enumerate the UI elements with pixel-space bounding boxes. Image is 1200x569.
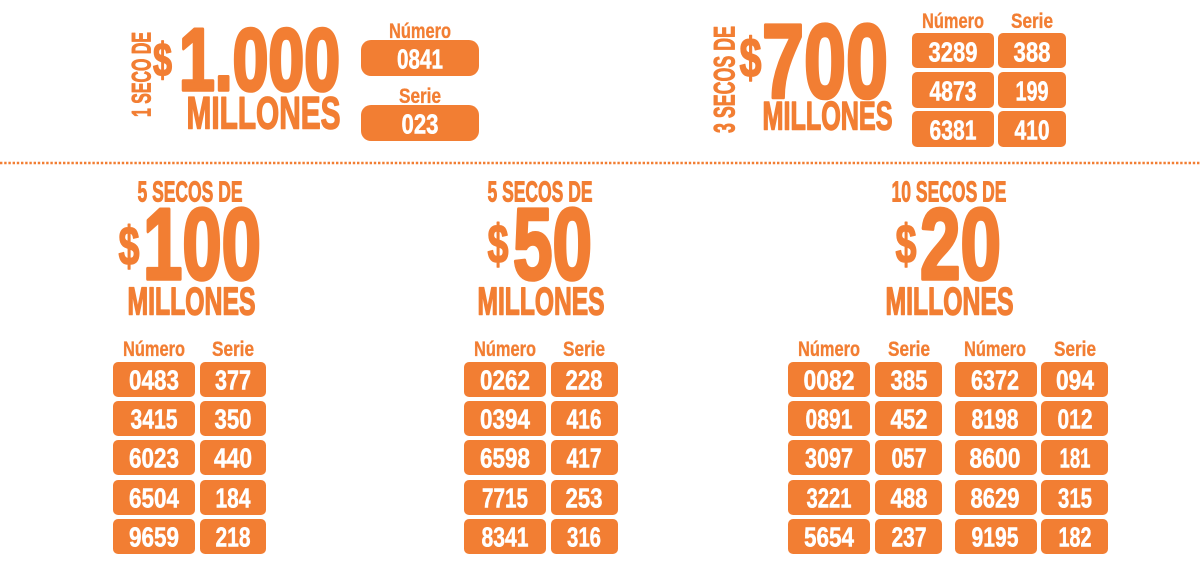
table headings — [474, 338, 605, 361]
table: winning numbers: 3415 — [130, 404, 178, 434]
table: winning numbers — [113, 362, 266, 554]
heading: numero: Número — [389, 20, 451, 43]
heading: serie: Serie — [399, 85, 441, 108]
table headings — [922, 10, 1053, 33]
table: winning numbers: 253 — [566, 482, 602, 514]
table: winning numbers: 228 — [566, 364, 602, 396]
table: winning numbers: 416 — [566, 404, 602, 434]
table: winning numbers: 410 — [1014, 114, 1050, 146]
table: winning numbers: 4873 — [930, 76, 976, 106]
table: winning numbers: 6023 — [129, 442, 179, 474]
panel: 3 secos de 700 millones — [708, 4, 1066, 147]
dollar sign: $ — [896, 213, 916, 275]
table: winning numbers: 6381 — [930, 114, 976, 146]
table headings: Número — [798, 338, 860, 361]
amount: 20: 20 — [920, 189, 1001, 301]
table: winning numbers: 385 — [890, 364, 928, 396]
dollar sign: $ — [118, 215, 140, 277]
table: winning numbers: 6372 — [971, 364, 1019, 396]
table: winning numbers: 8629 — [970, 482, 1020, 514]
heading: 5 secos de: 5 SECOS DE — [138, 176, 242, 208]
table: winning numbers: 199 — [1016, 76, 1048, 106]
millones: MILLONES — [128, 280, 256, 324]
table headings: Serie — [888, 338, 930, 361]
table headings: Número — [123, 338, 185, 361]
dollar sign: $ — [488, 213, 508, 275]
table: winning numbers — [912, 33, 1066, 147]
table: winning numbers: 6598 — [480, 442, 530, 474]
table headings: Serie — [1011, 10, 1053, 33]
table: winning numbers: 350 — [214, 404, 252, 434]
table: winning numbers: 440 — [214, 442, 252, 474]
table: winning numbers: 0483 — [129, 364, 179, 396]
panel: 10 secos de 20 millones — [788, 176, 1108, 554]
dollar sign: $ — [740, 26, 762, 89]
table: winning numbers: 218 — [216, 522, 250, 552]
table: winning numbers: 237 — [892, 522, 926, 552]
table: winning numbers: 3097 — [805, 442, 853, 474]
table: winning numbers: 8341 — [482, 522, 528, 552]
millones: MILLONES — [186, 88, 340, 138]
table: winning numbers: 8198 — [972, 404, 1018, 434]
table: winning numbers: 012 — [1058, 404, 1092, 434]
series pill — [361, 105, 479, 141]
number pill — [361, 40, 479, 76]
series pill: 023 — [402, 108, 438, 140]
table: winning numbers: 5654 — [804, 522, 854, 552]
table headings: Serie — [563, 338, 605, 361]
table: winning numbers: 0394 — [480, 404, 530, 434]
millones: MILLONES — [478, 280, 604, 324]
table: winning numbers: 7715 — [482, 482, 528, 514]
panel: 5 secos de 50 millones — [464, 176, 618, 554]
table: winning numbers: 3289 — [928, 36, 978, 68]
table: winning numbers: 182 — [1058, 522, 1092, 552]
amount: 1.000: 1.000 — [179, 10, 340, 109]
table headings — [123, 338, 254, 361]
table: winning numbers: 094 — [1056, 364, 1094, 396]
number pill: 0841 — [397, 44, 443, 74]
table headings: Número — [474, 338, 536, 361]
panel: 5 secos de 100 millones — [113, 176, 266, 554]
table headings: Serie — [212, 338, 254, 361]
table: winning numbers: 0262 — [480, 364, 530, 396]
table: winning numbers: 057 — [892, 442, 926, 474]
table headings: Número — [922, 10, 984, 33]
table: winning numbers: 488 — [890, 482, 928, 514]
table headings: Número — [964, 338, 1026, 361]
table: winning numbers: 6504 — [129, 482, 179, 514]
table: winning numbers: 388 — [1014, 36, 1050, 68]
table: winning numbers: 9195 — [972, 522, 1018, 552]
table: winning numbers: 181 — [1060, 442, 1090, 474]
table: winning numbers: 377 — [215, 364, 251, 396]
table: winning numbers: 315 — [1058, 482, 1092, 514]
millones: MILLONES — [886, 280, 1014, 324]
millones: MILLONES — [762, 94, 892, 138]
amount: 100: 100 — [143, 189, 261, 301]
table: winning numbers: 0082 — [804, 364, 854, 396]
heading: 10 secos de: 10 SECOS DE — [892, 176, 1006, 208]
table: winning numbers: 452 — [890, 404, 928, 434]
table: winning numbers: 417 — [566, 442, 602, 474]
table: winning numbers: 9659 — [129, 522, 179, 552]
table: winning numbers: 184 — [216, 482, 251, 514]
table headings — [798, 338, 1096, 361]
amount: 50: 50 — [513, 189, 592, 301]
panel: 1 seco de 1.000 millones — [126, 10, 479, 141]
table: winning numbers — [788, 362, 1108, 554]
heading: 5 secos de: 5 SECOS DE — [488, 176, 592, 208]
table: winning numbers: 8600 — [970, 442, 1020, 474]
table: winning numbers: 3221 — [806, 482, 852, 514]
dollar sign: $ — [153, 33, 172, 86]
amount: 700: 700 — [762, 4, 888, 120]
table headings: Serie — [1054, 338, 1096, 361]
table: winning numbers: 0891 — [806, 404, 852, 434]
table: winning numbers — [464, 362, 618, 554]
table: winning numbers: 316 — [567, 522, 601, 552]
